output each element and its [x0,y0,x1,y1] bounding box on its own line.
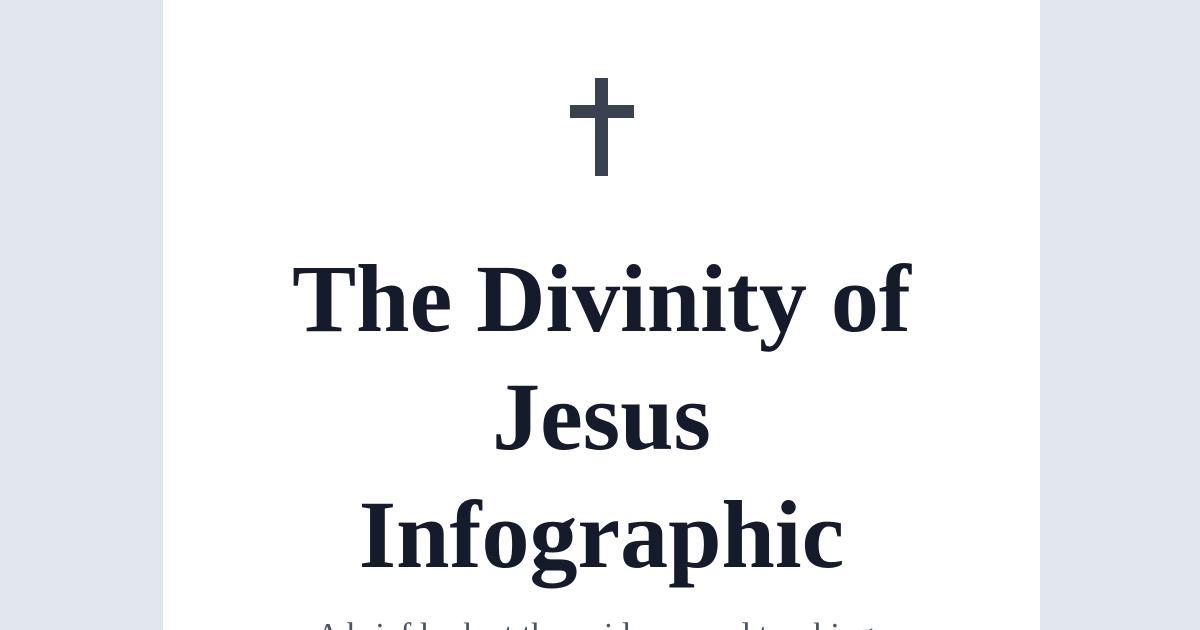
title: The Divinity of [292,245,911,352]
panel: card [163,0,1040,630]
icon: cross [570,78,634,176]
title [292,245,912,588]
title: Jesus [492,363,711,470]
title: Infographic [359,481,844,588]
